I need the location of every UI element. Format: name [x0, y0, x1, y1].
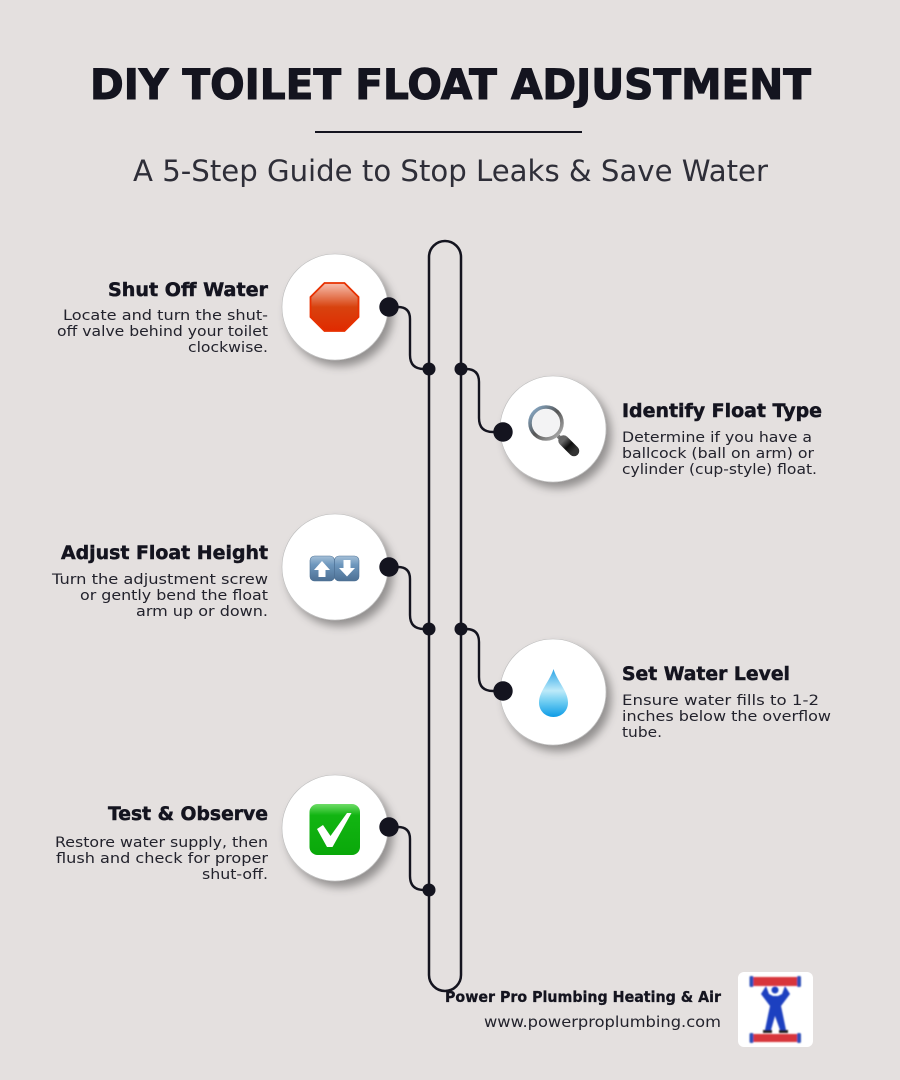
step 5 junction: [422, 884, 436, 896]
company logo: [738, 972, 813, 1047]
icon: green check mark: [310, 804, 360, 855]
icon: stop sign: [310, 283, 358, 331]
step 5 description: [55, 835, 268, 883]
step 1 description: [57, 308, 269, 356]
title: DIY TOILET FLOAT ADJUSTMENT: [90, 60, 811, 109]
step 5 description: flush and check for proper: [56, 851, 268, 867]
step 2 description: cylinder (cup-style) float.: [622, 462, 817, 478]
step 1 circle: [282, 254, 388, 360]
step 3 description: arm up or down.: [136, 604, 268, 620]
step 5 dot: [379, 817, 399, 837]
icon: magnifying glass: [530, 407, 574, 451]
step 3: adjust float height: [51, 514, 435, 636]
step 3 heading: Adjust Float Height: [61, 542, 268, 564]
step 5: test and observe: [55, 775, 436, 896]
step 3 description: or gently bend the float: [80, 588, 269, 604]
step 1 description: clockwise.: [188, 340, 268, 356]
step 2 description: Determine if you have a: [622, 430, 812, 446]
step 2 connector: [461, 369, 503, 432]
step 1 dot: [379, 297, 399, 317]
step 4 description: inches below the overflow: [622, 709, 831, 725]
step 2 heading: Identify Float Type: [622, 400, 822, 422]
step 3 description: [51, 572, 269, 620]
step 2 description: ballcock (ball on arm) or: [622, 446, 814, 462]
step 1 connector: [389, 307, 429, 369]
icon: up and down arrow keys: [310, 556, 359, 581]
step 4 dot: [493, 681, 513, 701]
step 4 heading: Set Water Level: [622, 663, 790, 685]
step 5 circle: [282, 775, 388, 881]
step 4 description: [622, 693, 831, 741]
step 2: identify float type: [454, 362, 822, 482]
icon: water drop: [539, 669, 568, 717]
step 1 heading: Shut Off Water: [108, 279, 269, 301]
step 2 dot: [493, 422, 513, 442]
step 3 connector: [389, 567, 429, 629]
central pipe timeline: [429, 241, 461, 991]
subtitle: A 5-Step Guide to Stop Leaks & Save Water: [133, 154, 768, 188]
step 3 circle: [282, 514, 388, 620]
step 3 description: Turn the adjustment screw: [51, 572, 268, 588]
step 3 dot: [379, 557, 399, 577]
step 1 junction: [422, 362, 436, 376]
step 4: set water level: [454, 622, 831, 745]
step 3 junction: [422, 622, 436, 636]
footer website: www.powerproplumbing.com: [484, 1013, 721, 1031]
step 4 description: Ensure water fills to 1-2: [622, 693, 819, 709]
step 4 junction: [454, 622, 468, 636]
step 2 junction: [454, 362, 468, 376]
step 2 description: [622, 430, 817, 478]
step 1 description: off valve behind your toilet: [57, 324, 269, 340]
step 1 description: Locate and turn the shut-: [63, 308, 268, 324]
step 5 heading: Test & Observe: [108, 803, 268, 825]
step 5 connector: [389, 827, 429, 890]
footer company name: Power Pro Plumbing Heating & Air: [445, 988, 722, 1006]
step 5 description: shut-off.: [202, 867, 268, 883]
step 2 circle: [500, 376, 606, 482]
step 5 description: Restore water supply, then: [55, 835, 268, 851]
step 1: shut off water: [57, 254, 436, 376]
step 4 description: tube.: [622, 725, 662, 741]
step 4 connector: [461, 629, 503, 691]
step 4 circle: [500, 639, 606, 745]
